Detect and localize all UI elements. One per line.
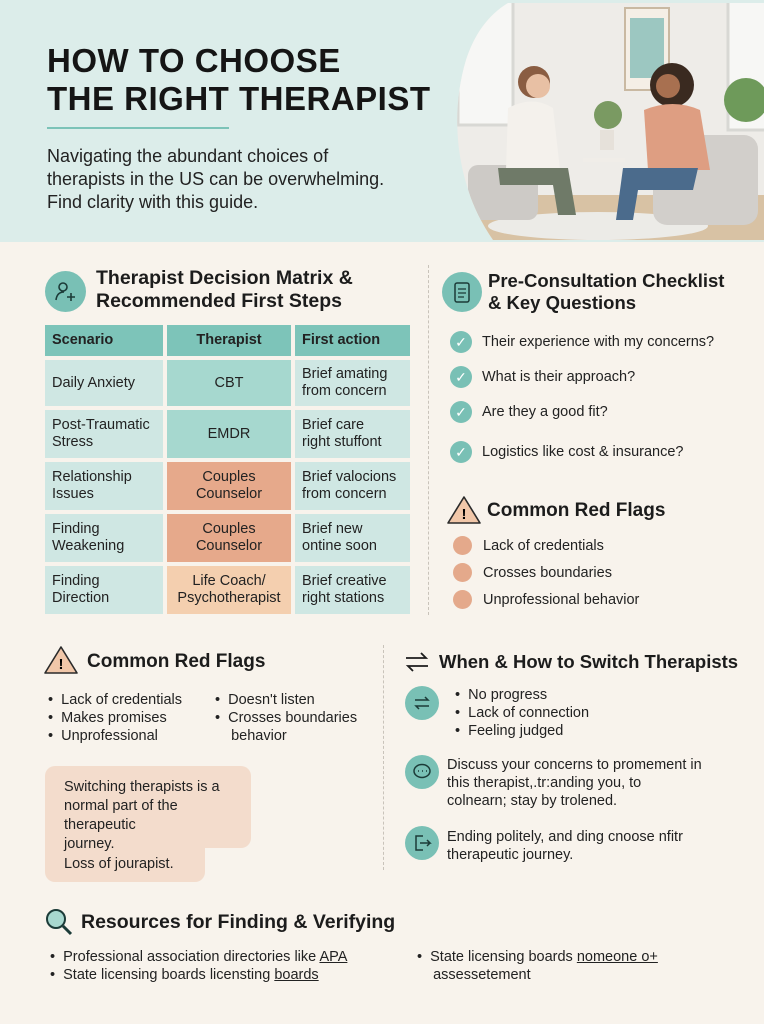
table: Brief care [302,417,364,433]
callout: journey. [64,836,115,852]
heading: Pre-Consultation Checklist [488,270,724,291]
panel: when & how to switch: colnearn; stay by trolened. [447,793,617,809]
panel: when & how to switch: • Feeling judged [455,723,563,739]
title underline [47,127,229,129]
table: Counselor [196,538,262,554]
photo: therapy session [457,3,764,240]
table: Couples [202,469,256,485]
bullet lists: • Makes promises [48,710,167,726]
table: Therapist [196,332,262,348]
heading: Therapist Decision Matrix & [96,267,353,289]
callout: therapeutic [64,817,136,833]
table: First action [302,332,380,348]
checklist items: ✓ [455,334,467,350]
table: EMDR [208,426,250,442]
table: Counselor [196,486,262,502]
table: Couples [202,521,256,537]
bullet lists: • Unprofessional [48,728,158,744]
intro text: Find clarity with this guide. [47,192,258,212]
panel: decision matrix [45,267,410,614]
icon: warning: ! [58,656,64,673]
checklist items: What is their approach? [482,369,635,385]
table: Finding [52,521,100,537]
table: Finding [52,573,100,589]
icon: magnifier [46,909,72,935]
panel: common red flags (right) [447,496,665,609]
table: ontine soon [302,538,377,554]
table: Psychotherapist [177,590,281,606]
panel: when & how to switch: • Lack of connection [455,705,589,721]
title [47,42,431,117]
panel: common red flags (left): • Crosses boundaries [215,710,357,726]
panel: resources: • Professional association directories like APA [50,949,347,965]
icon: chat [405,755,439,789]
table: from concern [302,486,387,502]
icon: warning [447,496,481,524]
intro text: therapists in the US can be overwhelming. [47,169,384,189]
icon: clipboard [442,272,482,312]
heading: Common Red Flags [487,500,665,521]
panel: when & how to switch [405,651,738,863]
title: HOW TO CHOOSE [47,42,341,79]
panel: resources [46,909,658,983]
panel: when & how to switch: Discuss your concerns to promement in [447,757,702,773]
table: CBT [214,374,244,390]
panel: common red flags (left) [44,646,357,882]
icon: warning [44,646,78,674]
checklist items: Are they a good fit? [482,404,608,420]
heading: Resources for Finding & Verifying [81,911,395,933]
panel: resources: • State licensing boards nomeone o+ [417,949,658,965]
intro text [47,146,384,212]
panel: resources: • State licensing boards licensting boards [50,967,319,983]
table: right stuffont [302,434,382,450]
icon: warning: ! [462,506,466,523]
panel: common red flags (right): Lack of credentials [483,538,604,554]
checklist items [450,331,714,463]
table [45,325,410,614]
checklist items: Their experience with my concerns? [482,334,714,350]
callout: Loss of jourapist. [64,856,174,872]
heading: Recommended First Steps [96,290,342,312]
panel: common red flags (left): • Doesn't listen [215,692,315,708]
table: Brief amating [302,366,387,382]
heading: When & How to Switch Therapists [439,651,738,672]
callout [45,766,251,882]
icon: person add [45,271,86,312]
icon: cycle [405,686,439,720]
heading: Common Red Flags [87,651,265,672]
bullet lists [48,692,182,744]
intro text: Navigating the abundant choices of [47,146,328,166]
table: Post-Traumatic [52,417,150,433]
panel: resources: assessetement [433,967,531,983]
checklist items: ✓ [455,404,467,420]
heading [488,270,724,313]
heading [96,267,353,312]
icon: swap arrows [406,652,428,672]
checklist items: ✓ [455,369,467,385]
icon: exit [405,826,439,860]
callout: Switching therapists is a [64,779,220,795]
table: Daily Anxiety [52,374,135,390]
table: Relationship [52,469,132,485]
panel: when & how to switch: Ending politely, and ding cnoose nfitr [447,829,683,845]
table: right stations [302,590,384,606]
title: THE RIGHT THERAPIST [47,80,431,117]
table: Scenario [52,332,113,348]
checklist items: Logistics like cost & insurance? [482,444,684,460]
panel: when & how to switch: • No progress [455,687,547,703]
table: from concern [302,383,387,399]
table: Brief new [302,521,362,537]
checklist items: ✓ [455,444,467,460]
panel: common red flags (right): Crosses boundaries [483,565,612,581]
table: Life Coach/ [192,573,266,589]
table: Brief creative [302,573,387,589]
table: Issues [52,486,94,502]
panel: when & how to switch: therapeutic journey. [447,847,573,863]
bullet lists: • Lack of credentials [48,692,182,708]
panel: pre-consultation checklist [442,270,724,463]
panel: when & how to switch: this therapist,.tr:anding you, to [447,775,641,791]
table: Stress [52,434,93,450]
header band [0,0,764,242]
panel: common red flags (left): behavior [231,728,287,744]
callout: normal part of the [64,798,178,814]
table: Weakening [52,538,124,554]
table: Direction [52,590,109,606]
heading: & Key Questions [488,292,636,313]
table: Brief valocions [302,469,396,485]
panel: common red flags (right): Unprofessional behavior [483,592,639,608]
